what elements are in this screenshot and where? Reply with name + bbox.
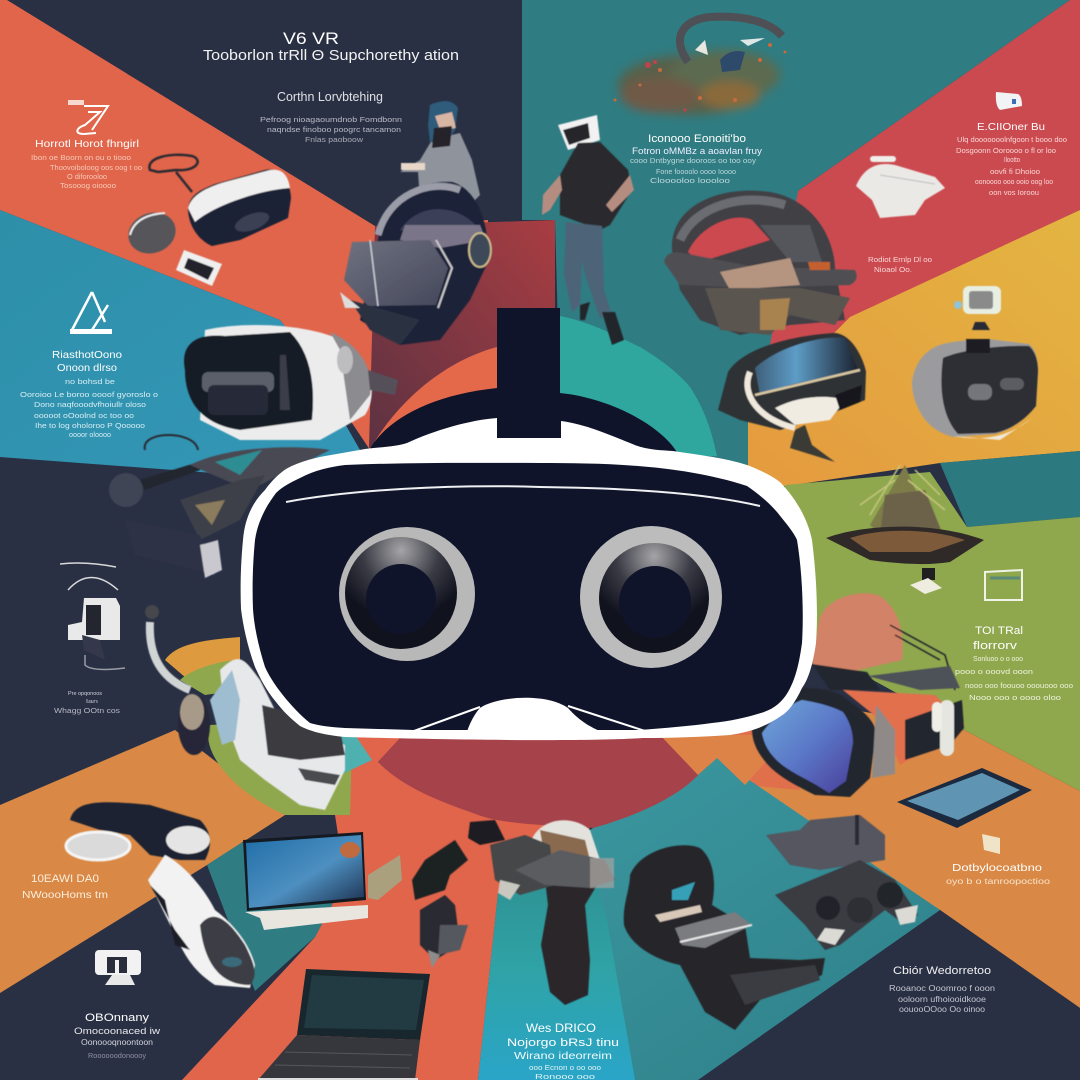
left lens [339, 527, 475, 661]
centre controller gadget [468, 820, 615, 1005]
icon: white device [95, 950, 141, 985]
panel text: navy bottom left with icon: Omocoonaced iw [74, 1026, 161, 1036]
panel text: green right: pooo o ooovd ooon [955, 667, 1033, 676]
panel text: red top right: Dosgoonn Ooroooo o fl or loo [956, 146, 1056, 155]
panel text: blue left with icon: ooooot oOoolnd oc too oo [34, 411, 134, 420]
panel text: green right: nooo ooo foouoo ooouooo ooo [965, 681, 1073, 690]
panel text: red top right: Nioaol Oo. [874, 265, 912, 274]
panel text: red top right: Rodiot Ernlp Dl oo [868, 255, 932, 264]
headset: large grey visor [340, 182, 491, 345]
panel text: navy bottom left with icon: OBOnnany [85, 1012, 150, 1024]
panel text: blue left with icon: Ihe to log oholoroo P Qooooo [35, 421, 145, 430]
panel text: teal top: cooo Dntbygne dooroos oo too ooy [630, 156, 756, 165]
panel text: bright teal bottom: Wirano ideorreim [514, 1051, 612, 1062]
dark gadgets: left cluster [109, 435, 330, 578]
panel text: navy left: Whagg OOtn cos [54, 708, 121, 715]
title: V6 VR [283, 29, 339, 48]
panel text: teal top: Fone foooolo oooo Ioooo [656, 167, 736, 176]
panel text: green right: Sonluoo o o ooo [973, 654, 1023, 663]
panel text: bright teal bottom: Nojorgo bRsJ tinu [507, 1037, 619, 1049]
panel text: navy bottom left with icon [74, 950, 161, 1060]
text block: top navy panel [260, 90, 402, 144]
panel text: red top right [868, 92, 1067, 274]
panel text: orange left lower: 10EAWI DA0 [31, 873, 99, 885]
tablet [897, 768, 1032, 828]
panel text: orange left with icon: Tosooog oioooo [60, 181, 116, 190]
panel text: navy bottom right: oouooOOoo Oo oinoo [899, 1005, 986, 1014]
panel text: red top right: oonoooo ooo ooio oog loo [975, 177, 1053, 186]
panel text: blue left with icon: Onoon dlrso [57, 362, 117, 374]
panel text: bright teal bottom: ooo Ecnon o oo ooo [529, 1063, 601, 1072]
panel text: orange left with icon: Thoovoiboloog oos oog t oo [50, 163, 142, 172]
panel text: navy bottom left with icon: Roooooodonoooy [88, 1053, 147, 1060]
camera stack gadget [412, 840, 468, 968]
text block: top navy panel: naqndse finoboo poogrc tancamon [267, 125, 401, 134]
text block: top navy panel: Fnlas paoboow [305, 137, 364, 144]
panel text: green right: Nooo ooo o oooo oloo [969, 693, 1061, 702]
panel text: blue left with icon: Ooroioo Le boroo oooof gyoroslo o [20, 390, 158, 399]
icon: compass triangle [70, 292, 112, 334]
headset: right dark grey [912, 339, 1038, 440]
panel text: red top right: Ulq dooooooolnfgoon t booo doo [957, 135, 1067, 144]
panel text: teal top [630, 133, 762, 185]
headset: blue visor [718, 333, 866, 462]
white device: red panel [856, 156, 945, 218]
panel text: navy bottom right: Rooanoc Ooomroo f ooon [889, 984, 995, 993]
helmet: large strap headset [664, 191, 857, 335]
game controllers group [766, 815, 918, 950]
icon: book frame [985, 570, 1022, 600]
panel text: green right [955, 570, 1073, 702]
panel text: green right: TOI TRal [975, 625, 1023, 637]
panel text: green right: florrorv [973, 640, 1018, 652]
panel text: navy left [54, 563, 125, 715]
right lens [580, 526, 722, 668]
headset: left white and black [184, 325, 398, 440]
panel text: navy bottom right [889, 965, 995, 1014]
monitor [243, 832, 402, 930]
strap and dome [368, 308, 677, 452]
title [203, 29, 459, 64]
person with headset: top centre left [400, 101, 480, 205]
icon: small card [982, 834, 1000, 854]
icon: easel logo [68, 100, 108, 134]
panel text: blue left with icon: oooor oloooo [69, 430, 111, 439]
headset: right with space screen [752, 593, 965, 797]
inner dark face [253, 463, 803, 730]
panel text: blue left with icon: Dono naqfooodvfhoiullr oloso [34, 400, 146, 409]
panel text: orange left lower: NWoooHoms tm [22, 889, 108, 901]
panel text: blue left with icon: RiasthotOono [52, 349, 122, 361]
panel text: navy left: lan [86, 699, 98, 705]
white mouse headset [66, 802, 255, 988]
icon: small retro tv [954, 286, 1001, 330]
panel text: teal top: Clooooloo loooloo [650, 176, 730, 185]
panel text: orange right [946, 834, 1051, 886]
panel text: navy left: Pre opqonoos [68, 691, 102, 697]
laptop [258, 969, 430, 1080]
highlight strokes [286, 486, 760, 506]
panel text: bright teal bottom [507, 1021, 619, 1080]
plant on platform [826, 465, 984, 594]
central headset [241, 308, 817, 740]
panel text: orange left with icon: Ibon oe Boorn on ou o tiooo [31, 153, 131, 162]
panel text: red top right: E.CIIOner Bu [977, 121, 1045, 133]
text block: top navy panel: Pefroog nioagaoumdnob Fomdbonn [260, 115, 402, 124]
black VR with controller [624, 845, 825, 1030]
floral headset illustration [614, 17, 786, 115]
panel text: orange right: Dotbylocoatbno [952, 862, 1042, 874]
headset: upper left white and navy [123, 155, 291, 286]
panel text: orange right: oyo b o tanroopoctioo [946, 877, 1051, 886]
panel text: red top right: Ilootto [1004, 155, 1020, 164]
panel text: navy bottom right: ooloorn ufhoiooidkooe [898, 995, 987, 1004]
panel text: orange left with icon [31, 100, 142, 190]
panel text: navy bottom left with icon: Oonoooqnoontoon [81, 1038, 153, 1047]
outer white shell [241, 418, 817, 740]
panel text: navy bottom right: Cbiór Wedorretoo [893, 965, 991, 977]
panel text: teal top: Iconooo Eonoiti'bo [648, 133, 746, 145]
panel text: red top right: oovfi fi Dhoioo [990, 167, 1040, 176]
panel text: orange left with icon: Horrotl Horot fhngirl [35, 138, 139, 150]
panel text: red top right: oon vos Ioroou [989, 188, 1039, 197]
panel text: bright teal bottom: Wes DRICO [526, 1021, 596, 1035]
panel text: blue left with icon: no bohsd be [65, 377, 115, 386]
person with headset: top centre [542, 115, 634, 345]
cord [149, 155, 198, 192]
icon: white scanner with signal arcs [60, 563, 125, 669]
icon: white device [996, 92, 1022, 110]
panel text: orange left with icon: O diforooloo [67, 172, 107, 181]
title: Tooborlon trRll Θ Supchorethy ation [203, 47, 459, 64]
panel text: blue left with icon [20, 292, 158, 439]
panel text: teal top: Fotron oMMBz a aoavlan fruy [632, 146, 762, 157]
text block: top navy panel: Corthn Lorvbtehing [277, 90, 383, 104]
headset: lower left white with arm [145, 605, 345, 810]
panel text: orange left lower [22, 873, 108, 901]
nose bridge [467, 698, 602, 732]
